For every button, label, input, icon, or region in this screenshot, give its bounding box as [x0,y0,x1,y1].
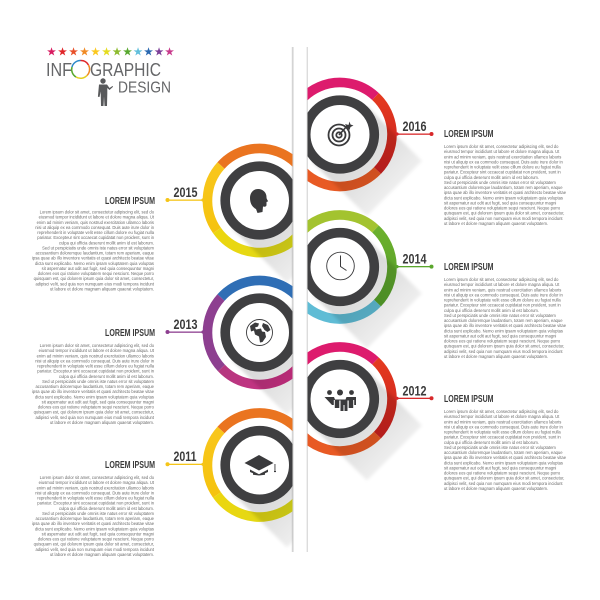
2012 body text: Sed ut perspiciatis unde omnis iste natus error sit voluptatem [444,445,556,450]
logo rainbow O [72,60,90,78]
2012 body text: ipsa quae ab illo inventore veritatis et quasi architecto beatae vitae [444,455,567,460]
2011 heading: LOREM IPSUM [105,460,155,471]
2012 body text: ut labore et dolore magnam aliquam quaerat voluptatem. [444,486,548,491]
2012 icon: people [324,390,356,411]
2013 year: 2013 [174,316,198,332]
2016 body text: eiusmod tempor incididunt ut labore et dolore magna aliqua. Ut [444,149,560,154]
2011 body text: enim ad minim veniam, quis nostrud exercitation ullamco laboris [37,485,154,490]
logo stars: ★ [164,44,175,58]
2015 body text: accusantium doloremque laudantium, totam rem aperiam, eaque [35,251,155,256]
2014 body text: eiusmod tempor incididunt ut labore et dolore magna aliqua. Ut [444,282,560,287]
2012 body text: reprehenderit in voluptate velit esse cillum dolore eu fugiat nulla [444,430,561,435]
2015 dark disc [225,166,294,235]
2015 body text: pariatur. Excepteur sint occaecat cupidatat non proident, sunt in [37,235,155,240]
2013 heading: LOREM IPSUM [105,328,155,339]
logo stars [46,44,175,58]
2016 shadow [312,107,422,216]
2011 dark disc [225,431,294,499]
2016 year: 2016 [402,118,427,134]
2012 body text: enim ad minim veniam, quis nostrud exercitation ullamco laboris [444,419,561,424]
2016 heading: LOREM IPSUM [444,129,494,140]
2016 body text: nisi ut aliquip ex ea commodo consequat. Duis aute irure dolor in [444,159,563,164]
2011 body text: Lorem ipsum dolor sit amet, consectetur adipiscing elit, sed do [40,475,155,480]
2015 body text: ut labore et dolore magnam aliquam quaerat voluptatem. [50,286,154,291]
step 2016 [288,82,567,226]
2014 body text: sit aspernatur aut odit aut fugit, sed quia consequuntur magni [444,333,556,338]
2014 body text: ut labore et dolore magnam aliquam quaerat voluptatem. [444,354,548,359]
2016 ring [288,82,392,186]
2016 body text: pariatur. Excepteur sint occaecat cupidatat non proident, sunt in [444,170,561,175]
2015 body text: quisquam est, qui dolorem ipsum quia dolor sit amet, consectetur, [34,276,154,281]
2014 shadow [312,239,422,348]
2016 body text: enim ad minim veniam, quis nostrud exercitation ullamco laboris [444,154,561,159]
2013 connector [166,330,205,334]
2011 body text: pariatur. Excepteur sint occaecat cupidatat non proident, sunt in [37,501,155,506]
2014 body text: pariatur. Excepteur sint occaecat cupidatat non proident, sunt in [444,303,561,308]
2012 body text: culpa qui officia deserunt mollit anim id est laborum. [444,440,539,445]
2012 body text: adipisci velit, sed quia non numquam eius modi tempora incidunt [444,481,563,486]
2011 shadow [232,437,292,546]
logo stars: ★ [46,44,57,58]
2014 body text: dolores eos qui ratione voluptatem sequi nesciunt. Neque porro [444,339,561,344]
2015 body text: Sed ut perspiciatis unde omnis iste natus error sit voluptatem [42,245,155,250]
logo word: DESIGN: DESIGN [118,80,171,97]
logo stars: ★ [90,44,101,58]
logo stars: ★ [57,44,68,58]
2011 body text: ut labore et dolore magnam aliquam quaerat voluptatem. [50,552,154,557]
2012 ring [288,347,392,451]
2016 body text: dicta sunt explicabo. Nemo enim ipsam voluptatem quia voluptas [444,195,563,200]
2013 body text: quisquam est, qui dolorem ipsum quia dolor sit amet, consectetur, [34,410,154,415]
step 2014 [288,215,567,359]
2016 body text: dolores eos qui ratione voluptatem sequi nesciunt. Neque porro [444,206,561,211]
2014 body text: Sed ut perspiciatis unde omnis iste natus error sit voluptatem [444,313,556,318]
2016 body text: reprehenderit in voluptate velit esse cillum dolore eu fugiat nulla [444,165,561,170]
logo stars: ★ [154,44,164,58]
2015 shadow [232,172,292,282]
2012 body text: pariatur. Excepteur sint occaecat cupidatat non proident, sunt in [444,435,561,440]
logo stars: ★ [143,44,154,58]
2015 ring [207,148,312,253]
2011 body text: dolores eos qui ratione voluptatem sequi nesciunt. Neque porro [38,537,155,542]
2012 shadow [312,371,422,480]
2015 body text: eiusmod tempor incididunt ut labore et dolore magna aliqua. Ut [39,215,155,220]
2013 body text: nisi ut aliquip ex ea commodo consequat. Duis aute irure dolor in [35,358,155,363]
2012 body text: nisi ut aliquip ex ea commodo consequat. Duis aute irure dolor in [444,424,563,429]
step 2011 [32,408,292,557]
2015 body text: Lorem ipsum dolor sit amet, consectetur adipiscing elit, sed do [40,210,155,214]
2011 body text: ipsa quae ab illo inventore veritatis et quasi architecto beatae vitae [32,521,155,526]
logo stars: ★ [101,44,112,58]
2013 shadow [232,304,292,414]
2011 body text: eiusmod tempor incididunt ut labore et dolore magna aliqua. Ut [39,480,155,485]
step 2013 [32,276,292,425]
2014 body text: Lorem ipsum dolor sit amet, consectetur adipiscing elit, sed do [444,277,559,282]
timeline rails [292,47,308,552]
logo stars: ★ [133,44,143,58]
2013 body text: dicta sunt explicabo. Nemo enim ipsam voluptatem quia voluptas [35,394,154,399]
2015 body text: dolores eos qui ratione voluptatem sequi nesciunt. Neque porro [38,271,155,276]
2013 body text: dolores eos qui ratione voluptatem sequi nesciunt. Neque porro [38,405,155,410]
logo word: GRAPHIC: GRAPHIC [90,59,161,80]
step 2012 [288,347,567,491]
2015 body text: adipisci velit, sed quia non numquam eius modi tempora incidunt [35,281,155,286]
2012 dark disc [306,365,374,433]
2012 body text: dolores eos qui ratione voluptatem sequi nesciunt. Neque porro [444,471,561,476]
2011 body text: accusantium doloremque laudantium, totam rem aperiam, eaque [35,516,155,521]
2012 body text: eiusmod tempor incididunt ut labore et dolore magna aliqua. Ut [444,414,560,419]
2014 dark disc [306,233,374,301]
step 2015 [32,144,292,292]
2016 body text: ut labore et dolore magnam aliquam quaerat voluptatem. [444,221,548,226]
2013 body text: eiusmod tempor incididunt ut labore et dolore magna aliqua. Ut [39,348,155,353]
2011 icon: graduation cap [244,455,276,476]
2013 body text: adipisci velit, sed quia non numquam eius modi tempora incidunt [35,415,155,420]
2012 body text: quisquam est, qui dolorem ipsum quia dolor sit amet, consectetur, [444,476,564,481]
2014 body text: ipsa quae ab illo inventore veritatis et quasi architecto beatae vitae [444,323,567,328]
2011 ring [207,413,312,517]
2011 body text: reprehenderit in voluptate velit esse cillum dolore eu fugiat nulla [37,496,155,501]
2015 body text: enim ad minim veniam, quis nostrud exercitation ullamco laboris [37,220,154,225]
2015 body text: ipsa quae ab illo inventore veritatis et quasi architecto beatae vitae [32,256,155,261]
2014 body text: dicta sunt explicabo. Nemo enim ipsam voluptatem quia voluptas [444,328,563,333]
2013 body text: enim ad minim veniam, quis nostrud exercitation ullamco laboris [37,353,154,358]
2014 body text: adipisci velit, sed quia non numquam eius modi tempora incidunt [444,349,563,354]
2012 body text: dicta sunt explicabo. Nemo enim ipsam voluptatem quia voluptas [444,460,563,465]
2016 body text: ipsa quae ab illo inventore veritatis et quasi architecto beatae vitae [444,190,567,195]
2015 connector [166,198,205,202]
2016 body text: adipisci velit, sed quia non numquam eius modi tempora incidunt [444,216,563,221]
2016 body text: accusantium doloremque laudantium, totam rem aperiam, eaque [444,185,563,190]
2016 body text: quisquam est, qui dolorem ipsum quia dolor sit amet, consectetur, [444,211,564,216]
logo stars: ★ [79,44,90,58]
logo word: INF: INF [46,59,72,80]
2011 body text: adipisci velit, sed quia non numquam eius modi tempora incidunt [35,547,155,552]
2016 icon: target [328,122,354,146]
2015 body text: nisi ut aliquip ex ea commodo consequat. Duis aute irure dolor in [35,225,155,230]
2013 body text: ipsa quae ab illo inventore veritatis et quasi architecto beatae vitae [32,389,155,394]
2014 body text: accusantium doloremque laudantium, totam rem aperiam, eaque [444,318,563,323]
logo stars: ★ [68,44,79,58]
2012 body text: accusantium doloremque laudantium, totam rem aperiam, eaque [444,450,563,455]
2015 body text: reprehenderit in voluptate velit esse cillum dolore eu fugiat nulla [37,230,155,235]
2011 body text: nisi ut aliquip ex ea commodo consequat. Duis aute irure dolor in [35,490,155,495]
2012 connector [395,396,434,400]
2015 body text: culpa qui officia deserunt mollit anim id est laborum. [59,240,154,245]
2011 connector [166,462,205,466]
2013 icon: globe [246,320,272,346]
2015 heading: LOREM IPSUM [105,196,155,207]
2016 body text: Sed ut perspiciatis unde omnis iste natus error sit voluptatem [444,180,556,185]
2013 body text: ut labore et dolore magnam aliquam quaerat voluptatem. [50,420,154,425]
2014 body text: nisi ut aliquip ex ea commodo consequat. Duis aute irure dolor in [444,292,563,297]
2011 body text: dicta sunt explicabo. Nemo enim ipsam voluptatem quia voluptas [35,526,154,531]
2014 icon: clock [327,252,354,280]
2013 body text: reprehenderit in voluptate velit esse cillum dolore eu fugiat nulla [37,364,155,369]
2015 body text: dicta sunt explicabo. Nemo enim ipsam voluptatem quia voluptas [35,261,154,266]
logo presenter figure [98,78,113,106]
2011 body text: culpa qui officia deserunt mollit anim id est laborum. [59,506,154,511]
2012 heading: LOREM IPSUM [444,394,494,405]
logo stars: ★ [122,44,133,58]
2016 body text: sit aspernatur aut odit aut fugit, sed quia consequuntur magni [444,200,556,205]
2013 body text: sit aspernatur aut odit aut fugit, sed quia consequuntur magni [42,399,154,404]
2016 body text: culpa qui officia deserunt mollit anim id est laborum. [444,175,539,180]
logo stars: ★ [112,44,122,58]
2011 body text: sit aspernatur aut odit aut fugit, sed quia consequuntur magni [42,531,154,536]
2013 body text: Sed ut perspiciatis unde omnis iste natus error sit voluptatem [42,379,155,384]
2013 body text: Lorem ipsum dolor sit amet, consectetur adipiscing elit, sed do [40,343,155,348]
2012 body text: Lorem ipsum dolor sit amet, consectetur adipiscing elit, sed do [444,409,559,414]
2012 year: 2012 [402,382,427,398]
2011 body text: quisquam est, qui dolorem ipsum quia dolor sit amet, consectetur, [34,542,154,547]
2014 body text: quisquam est, qui dolorem ipsum quia dolor sit amet, consectetur, [444,344,564,349]
2014 ring [288,215,392,319]
2011 year: 2011 [174,448,197,464]
2013 body text: culpa qui officia deserunt mollit anim id est laborum. [59,374,154,379]
2013 ring [207,280,312,385]
2013 body text: pariatur. Excepteur sint occaecat cupidatat non proident, sunt in [37,369,155,374]
2016 connector [395,132,434,136]
2014 body text: reprehenderit in voluptate velit esse cillum dolore eu fugiat nulla [444,298,561,303]
2016 dark disc [306,100,374,169]
2014 heading: LOREM IPSUM [444,262,494,273]
2014 body text: culpa qui officia deserunt mollit anim id est laborum. [444,308,539,313]
2015 icon: head [250,189,268,213]
2015 body text: sit aspernatur aut odit aut fugit, sed quia consequuntur magni [42,266,154,271]
2014 body text: enim ad minim veniam, quis nostrud exercitation ullamco laboris [444,287,561,292]
2016 body text: Lorem ipsum dolor sit amet, consectetur adipiscing elit, sed do [444,144,559,149]
2014 connector [395,265,434,269]
logo: infographic design [46,44,175,106]
2014 year: 2014 [402,250,427,266]
2012 body text: sit aspernatur aut odit aut fugit, sed quia consequuntur magni [444,465,556,470]
2013 body text: accusantium doloremque laudantium, totam rem aperiam, eaque [35,384,155,389]
2011 body text: Sed ut perspiciatis unde omnis iste natus error sit voluptatem [42,511,155,516]
2013 dark disc [225,298,294,367]
2015 year: 2015 [174,184,198,200]
